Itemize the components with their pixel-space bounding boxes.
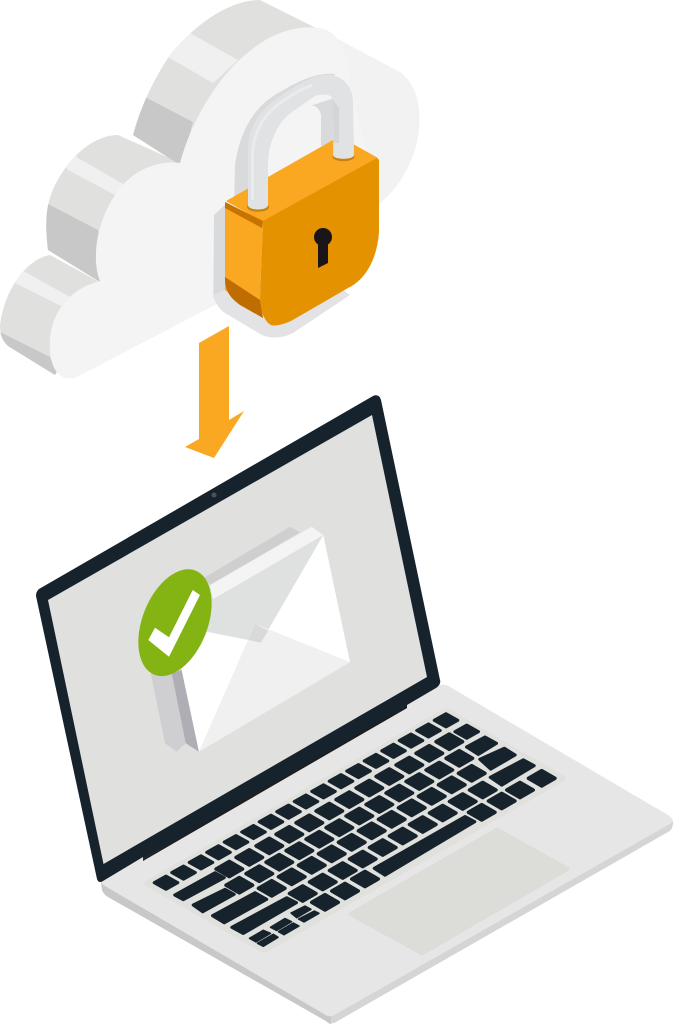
- lock body top: [226, 140, 378, 222]
- envelope depth: [172, 670, 199, 752]
- laptop base: [101, 685, 673, 1024]
- envelope with check badge: [124, 527, 350, 752]
- envelope open flap: [207, 535, 323, 643]
- base side edges: [101, 821, 673, 1023]
- envelope shadow: [151, 673, 186, 752]
- webcam: [212, 492, 216, 498]
- shackle inner shade: [310, 98, 334, 146]
- lock top band: [225, 202, 263, 228]
- touchpad: [348, 828, 570, 956]
- cloud small side lobe: [0, 255, 98, 375]
- lock body front: [260, 158, 379, 326]
- upper letter row: [193, 737, 496, 912]
- shackle highlight: [252, 85, 312, 200]
- padlock: [213, 74, 379, 337]
- shadow of lock side: [214, 205, 225, 295]
- envelope bottom flap: [199, 624, 350, 752]
- lock bottom band: [225, 277, 263, 318]
- screen display: [48, 415, 427, 864]
- envelope top edge: [210, 527, 323, 600]
- function row: [154, 714, 458, 889]
- base left side: [101, 882, 331, 1024]
- envelope right panel: [255, 535, 350, 662]
- shackle shadow: [234, 74, 335, 205]
- keyboard keys: [154, 714, 555, 946]
- arrow down: [185, 326, 244, 458]
- cloud medium side lobe: [46, 135, 176, 282]
- keyboard well: [144, 708, 566, 953]
- padlock shadow: [213, 205, 350, 337]
- base top: [101, 685, 672, 1016]
- bottom row and spacebar: [312, 771, 555, 910]
- check mark: [148, 590, 200, 657]
- envelope left panel: [175, 620, 248, 752]
- check badge: [124, 559, 226, 687]
- badge ellipse: [124, 559, 226, 687]
- keyhole: [314, 228, 332, 268]
- lower letter row: [232, 760, 534, 934]
- shackle feet rims: [247, 202, 269, 212]
- cloud back right lobe: [300, 27, 420, 260]
- cloud: [0, 0, 420, 380]
- screen bezel: [36, 395, 440, 882]
- shackle right shade: [333, 100, 339, 143]
- envelope top shadow: [203, 527, 300, 585]
- number row: [175, 725, 479, 900]
- laptop: [36, 395, 673, 1024]
- arrow keys: [250, 906, 319, 946]
- shackle: [248, 75, 354, 210]
- middle letter row: [212, 748, 515, 923]
- cloud large side lobe: [133, 0, 314, 163]
- hinge shadow: [143, 706, 407, 861]
- flap overlap: [248, 624, 268, 643]
- cloud front face: [50, 27, 378, 379]
- lock body left: [225, 203, 263, 318]
